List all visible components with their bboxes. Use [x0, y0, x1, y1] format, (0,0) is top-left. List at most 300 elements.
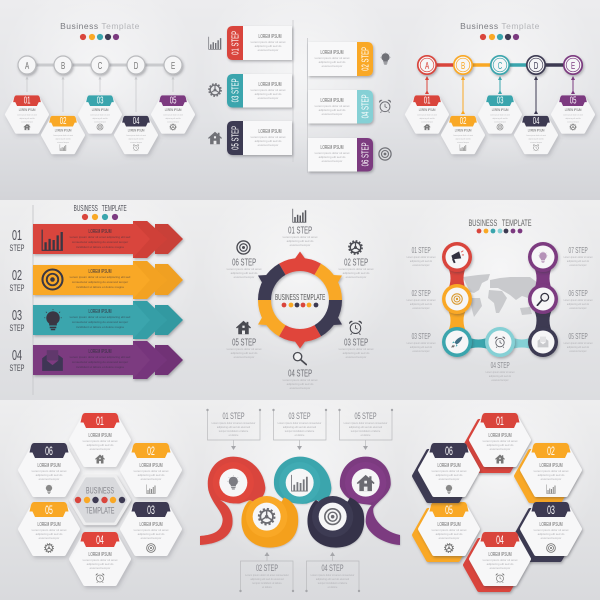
chain node 06 — [528, 284, 558, 314]
letters: D — [134, 59, 138, 71]
panel: arrow bars — [10, 205, 183, 395]
bracket 05 step: 05 STEP — [354, 411, 377, 421]
hexagon 06: LOREM IPSUM — [38, 462, 61, 468]
hexagon 02: 02 — [60, 116, 67, 126]
step 01 — [283, 209, 318, 247]
hexagon 04: LOREM IPSUM — [528, 128, 545, 133]
letters: E — [571, 59, 575, 71]
bracket 02 step — [239, 552, 294, 592]
swirl dark — [307, 496, 364, 548]
step 06: eiusmod tempor — [234, 275, 254, 279]
card 05 step: adipiscing elit sed do — [255, 139, 282, 143]
arrow bar 01: consectetur adipiscing do eiusmod tempor — [72, 240, 128, 244]
hexagon 03: 03 — [547, 504, 555, 518]
hexagon 01: adipiscing elit sed do — [487, 443, 514, 447]
card icons — [208, 37, 391, 160]
hexagon 03: Lorem ipsum dolor sit amet — [490, 113, 510, 117]
hexagon 02: Lorem ipsum dolor sit amet — [453, 134, 473, 137]
arrow bar 04: consectetur adipiscing do eiusmod tempor — [72, 360, 128, 364]
hexagon 05: adipiscing elit sed do — [165, 117, 181, 120]
hexagon 05 — [552, 95, 594, 132]
letters: A — [425, 59, 429, 71]
bracket 02 step: adipiscing elit sed do eiusmod — [250, 578, 284, 581]
hexagon 03: eiusmod tempor — [94, 120, 106, 124]
hexagon 01: LOREM IPSUM — [419, 107, 436, 112]
card 03 step: adipiscing elit sed do — [255, 92, 282, 96]
chain node 05 — [528, 327, 558, 357]
bracket 02 step: tempor incididunt ut labore — [252, 582, 282, 585]
heading: BUSINESS TEMPLATE — [468, 218, 532, 228]
step 02: adipiscing elit sed do — [343, 271, 370, 275]
bracket 05 step: Lorem ipsum dolor sit amet consectetur — [344, 422, 388, 425]
hexagon 02 — [42, 116, 84, 153]
step 06 — [227, 241, 262, 279]
swirl teal — [274, 457, 331, 504]
panel: circle chain with world map — [407, 218, 593, 382]
label 02 step: eiusmod tempor — [412, 307, 430, 310]
arrow bar 03: STEP — [10, 323, 24, 333]
hexagon 03: Lorem ipsum dolor sit amet — [534, 528, 569, 532]
label 07 step: Lorem ipsum dolor sit amet — [564, 256, 593, 259]
hexagon 03: LOREM IPSUM — [92, 107, 109, 112]
arrow bar 01: STEP — [10, 243, 24, 253]
card 06 step — [308, 138, 373, 172]
hexagon 04: eiusmod tempor — [90, 566, 110, 570]
hexagon 03: 03 — [97, 95, 104, 106]
label 03 step: 03 STEP — [412, 333, 431, 341]
hexagon 02: Lorem ipsum dolor sit amet — [134, 469, 169, 473]
step 06: adipiscing elit sed do — [231, 271, 258, 275]
arrow bar 02: consectetur adipiscing do eiusmod tempor — [72, 280, 128, 284]
bracket 01 step: 01 STEP — [222, 411, 245, 421]
step 03 — [339, 321, 374, 359]
arrow bar 03: LOREM IPSUM — [89, 308, 112, 314]
bracket 01 step: et dolore — [229, 434, 239, 437]
bracket 04 step: tempor incididunt ut labore — [318, 582, 348, 585]
hexagon 05: Lorem ipsum dolor sit amet — [563, 113, 583, 117]
card 06 step: 06 STEP — [360, 142, 371, 166]
label 06 step — [564, 290, 593, 310]
step 05: adipiscing elit sed do — [231, 351, 258, 355]
hexagon 06 — [20, 443, 78, 495]
card 02 step: 02 STEP — [360, 47, 371, 71]
hexagon 05: Lorem ipsum dolor sit amet — [163, 113, 183, 117]
hexagon 04: eiusmod tempor — [490, 566, 510, 570]
card 04 step: LOREM IPSUM — [321, 97, 344, 103]
hexagon 05: LOREM IPSUM — [165, 107, 182, 112]
hexagon 03: 03 — [147, 504, 155, 518]
hexagon 02: adipiscing elit sed do — [455, 137, 471, 141]
hexagon 01: 01 — [24, 95, 31, 106]
label 07 step: eiusmod tempor — [569, 264, 587, 267]
hexagon 01: LOREM IPSUM — [489, 432, 512, 438]
bracket 04 step: et dolore — [328, 586, 338, 589]
step 02: 02 STEP — [344, 257, 368, 268]
step 01: adipiscing elit sed do — [287, 239, 314, 243]
hexagon 06: eiusmod tempor — [439, 477, 459, 481]
card 02 step — [308, 42, 373, 76]
card 03 step: eiusmod tempor — [258, 96, 278, 100]
hexagon 04: Lorem ipsum dolor sit amet — [126, 134, 146, 137]
step 04: 04 STEP — [288, 368, 312, 379]
bracket 01 step: adipiscing elit sed do eiusmod — [217, 426, 251, 429]
vertical shadow line — [32, 205, 34, 395]
label 06 step: eiusmod tempor — [569, 307, 587, 310]
label 03 step: adipiscing elit sed do — [410, 346, 433, 349]
hexagon 02 — [516, 443, 580, 501]
hexagon 03: LOREM IPSUM — [140, 521, 163, 527]
hexagon 05: eiusmod tempor — [567, 120, 579, 124]
arrow bar 03: consectetur adipiscing do eiusmod tempor — [72, 320, 128, 324]
step 05: 05 STEP — [232, 337, 256, 348]
hexagon 01: adipiscing elit sed do — [87, 443, 114, 447]
hexagon 05: LOREM IPSUM — [565, 107, 582, 112]
colour dots — [82, 214, 118, 220]
arrow bar 01: Lorem ipsum dolor sit amet adipiscing elit sed — [70, 235, 131, 239]
hexagon 05: adipiscing elit sed do — [436, 532, 463, 536]
coloured letter circles — [418, 56, 582, 74]
card 03 step: 03 STEP — [230, 78, 241, 102]
hexagon 05 — [152, 95, 194, 132]
ring segments with spikes — [258, 252, 342, 348]
label 06 step: Lorem ipsum dolor sit amet — [564, 299, 593, 302]
hexagon 06: eiusmod tempor — [39, 477, 59, 481]
chain node 02 — [442, 284, 472, 314]
inner rings — [420, 58, 580, 72]
hexagon 05: 05 — [570, 95, 577, 106]
step 05: Lorem ipsum dolor sit amet — [227, 347, 262, 351]
world map — [463, 274, 538, 317]
bracket 02 step: 02 STEP — [256, 563, 278, 573]
hexagon 03: adipiscing elit sed do — [138, 532, 165, 536]
hexagon 03: adipiscing elit sed do — [538, 532, 565, 536]
hexagon 05: eiusmod tempor — [39, 536, 59, 540]
hexagon 01: Lorem ipsum dolor sit amet — [483, 439, 518, 443]
hexagon 03: 03 — [497, 95, 504, 106]
hexagon 06: LOREM IPSUM — [438, 462, 461, 468]
step 05: eiusmod tempor — [234, 355, 254, 359]
arrow bar 04: 04 — [12, 347, 22, 364]
label 02 step: 02 STEP — [412, 290, 431, 298]
hexagon 04: 04 — [533, 116, 540, 126]
panel: hexagon timeline coloured — [406, 21, 594, 153]
hexagon 02: eiusmod tempor — [141, 477, 161, 481]
hexagon 05 — [414, 502, 478, 560]
hexagon 03: eiusmod tempor — [494, 120, 506, 124]
hexagon 01: eiusmod tempor — [490, 447, 510, 451]
hexagon 02: 02 — [147, 445, 155, 459]
hexagon 04: 04 — [96, 534, 104, 548]
hexagon 04: adipiscing elit sed do — [87, 562, 114, 566]
hexagon 06: adipiscing elit sed do — [36, 473, 63, 477]
card 04 step: adipiscing elit sed do — [319, 108, 346, 112]
heading: BUSINESS TEMPLATE — [74, 205, 127, 213]
card 01 step: 01 STEP — [230, 31, 241, 55]
hexagon 04: LOREM IPSUM — [89, 551, 112, 557]
heading: business template: Business Template — [460, 21, 540, 31]
hexagon 04 — [115, 116, 157, 153]
connector line and arrows — [27, 65, 173, 112]
label 03 step: eiusmod tempor — [412, 350, 430, 353]
step 01: Lorem ipsum dolor sit amet — [283, 235, 318, 239]
bracket 04 step — [305, 552, 360, 592]
hexagon 06: 06 — [445, 445, 453, 459]
hexagon 01: eiusmod tempor — [90, 447, 110, 451]
card 02 step: eiusmod tempor — [322, 64, 342, 68]
card 06 step: eiusmod tempor — [322, 159, 342, 163]
hexagon 03 — [516, 502, 580, 560]
label 02 step — [407, 290, 436, 310]
panel: hexagon timeline grey — [6, 21, 194, 153]
bracket 04 step: 04 STEP — [321, 563, 344, 573]
hexagon 02: 02 — [460, 116, 467, 126]
letters: A — [25, 59, 29, 71]
hexagon 04: adipiscing elit sed do — [128, 137, 144, 141]
hexagon 03: LOREM IPSUM — [492, 107, 509, 112]
centre title: BUSINESS TEMPLATE — [275, 294, 326, 302]
label 04 step — [486, 362, 515, 382]
swirl purple — [340, 457, 400, 545]
letters: E — [171, 59, 175, 71]
hexagon 06: Lorem ipsum dolor sit amet — [432, 469, 467, 473]
arrow bar 04 — [10, 341, 183, 379]
hexagon 04 — [71, 532, 129, 584]
hexagon 01: eiusmod tempor — [21, 120, 33, 124]
label 05 step — [564, 333, 593, 353]
label 04 step: Lorem ipsum dolor sit amet — [486, 371, 515, 374]
label 01 step: Lorem ipsum dolor sit amet — [407, 256, 436, 259]
step 06: 06 STEP — [232, 257, 256, 268]
colour dots — [477, 229, 522, 233]
arrow bar 02: incididunt ut labore et dolore magna — [76, 285, 124, 289]
hexagon 02: eiusmod tempor — [457, 141, 469, 144]
bracket 03 step: adipiscing elit sed do eiusmod — [283, 426, 317, 429]
chain node 04 — [485, 327, 515, 357]
hexagon 06 — [414, 443, 478, 501]
step 01: eiusmod tempor — [290, 243, 310, 247]
centre hexagon: TEMPLATE — [85, 505, 115, 516]
hexagon 01 — [406, 95, 448, 132]
hexagon 04: eiusmod tempor — [530, 141, 542, 144]
step 01: 01 STEP — [288, 225, 312, 236]
hexagon 02: 02 — [547, 445, 555, 459]
hexagon 02: Lorem ipsum dolor sit amet — [53, 134, 73, 137]
step 02: eiusmod tempor — [346, 275, 366, 279]
step 03: eiusmod tempor — [346, 355, 366, 359]
card 01 step — [227, 26, 292, 60]
letters: D — [534, 59, 538, 71]
chain connectors — [447, 265, 553, 350]
heading: business template: Business Template — [60, 21, 140, 31]
step 04: eiusmod tempor — [290, 386, 310, 390]
panel: hexagon ring with coloured backs — [414, 413, 580, 590]
bracket 04 step: Lorem ipsum dolor sit amet consectetur — [311, 574, 355, 577]
label 07 step — [564, 247, 593, 267]
hexagon 01: Lorem ipsum dolor sit amet — [417, 113, 437, 117]
panel: hexagon flower — [20, 413, 180, 584]
hexagon 05: Lorem ipsum dolor sit amet — [432, 528, 467, 532]
hexagon 03 — [122, 502, 180, 554]
hexagon 02: adipiscing elit sed do — [138, 473, 165, 477]
hexagon 04 — [515, 116, 557, 153]
label 02 step: Lorem ipsum dolor sit amet — [407, 299, 436, 302]
colour dots — [480, 34, 519, 40]
hexagon 02: LOREM IPSUM — [140, 462, 163, 468]
arrow bar 01: 01 — [12, 227, 22, 244]
hexagon 05: 05 — [45, 504, 53, 518]
hexagon 05: 05 — [445, 504, 453, 518]
hexagon 05: eiusmod tempor — [439, 536, 459, 540]
step 03: adipiscing elit sed do — [343, 351, 370, 355]
step 02 — [339, 241, 374, 279]
label 05 step: 05 STEP — [569, 333, 588, 341]
hexagon 05: adipiscing elit sed do — [36, 532, 63, 536]
hexagon 01: 01 — [496, 415, 504, 429]
bracket 05 step — [338, 409, 393, 450]
card 03 step: LOREM IPSUM — [259, 81, 282, 87]
arrow bar 04: incididunt ut labore et dolore magna — [76, 365, 124, 369]
chain node 01 — [442, 242, 472, 272]
label 05 step: Lorem ipsum dolor sit amet — [564, 342, 593, 345]
hexagon 05: Lorem ipsum dolor sit amet — [32, 528, 67, 532]
arrow bar 02 — [10, 261, 183, 299]
card 01 step: LOREM IPSUM — [259, 33, 282, 39]
hexagon 02: adipiscing elit sed do — [538, 473, 565, 477]
label 05 step: adipiscing elit sed do — [567, 346, 590, 349]
card 01 step: adipiscing elit sed do — [255, 44, 282, 48]
bracket 03 step: Lorem ipsum dolor sit amet consectetur — [278, 422, 322, 425]
card 05 step: LOREM IPSUM — [259, 128, 282, 134]
arrow bar 01: incididunt ut labore et dolore magna — [76, 245, 124, 249]
bracket 03 step: et dolore — [295, 434, 305, 437]
label 04 step: adipiscing elit sed do — [489, 375, 512, 378]
hexagon 03 — [479, 95, 521, 132]
card 04 step: 04 STEP — [360, 94, 371, 118]
label 01 step: 01 STEP — [412, 247, 431, 255]
hexagon 03: LOREM IPSUM — [540, 521, 563, 527]
hexagon 05: adipiscing elit sed do — [565, 117, 581, 120]
letter circles — [18, 56, 182, 74]
card 05 step: 05 STEP — [230, 126, 241, 150]
bracket 05 step: et dolore — [361, 434, 371, 437]
hexagon 02: LOREM IPSUM — [55, 128, 72, 133]
hexagon 02 — [122, 443, 180, 495]
hexagon 01: eiusmod tempor — [421, 120, 433, 124]
arrow bar 01 — [10, 221, 183, 258]
hexagon 01: adipiscing elit sed do — [19, 117, 35, 120]
arrow bar 02: LOREM IPSUM — [89, 268, 112, 274]
bracket 05 step: adipiscing elit sed do eiusmod — [349, 426, 383, 429]
card 06 step: LOREM IPSUM — [321, 144, 344, 150]
card 01 step: eiusmod tempor — [258, 48, 278, 52]
arrow bar 02: 02 — [12, 267, 22, 284]
label 02 step: adipiscing elit sed do — [410, 303, 433, 306]
hexagon 02: eiusmod tempor — [57, 141, 69, 144]
hexagon 05: eiusmod tempor — [167, 120, 179, 124]
card 01 step: Lorem ipsum dolor sit amet — [251, 40, 286, 44]
step 04: Lorem ipsum dolor sit amet — [283, 378, 318, 382]
letters: C — [498, 59, 502, 71]
hexagon 01: LOREM IPSUM — [19, 107, 36, 112]
hexagon 02: LOREM IPSUM — [455, 128, 472, 133]
arrow bar 04: LOREM IPSUM — [89, 348, 112, 354]
hexagon 04: 04 — [496, 534, 504, 548]
label 01 step: eiusmod tempor — [412, 264, 430, 267]
hexagon 03: eiusmod tempor — [141, 536, 161, 540]
hexagon 01: Lorem ipsum dolor sit amet — [83, 439, 118, 443]
hexagon 02 — [442, 116, 484, 153]
card 04 step: Lorem ipsum dolor sit amet — [315, 104, 350, 108]
card 02 step: LOREM IPSUM — [321, 49, 344, 55]
hexagon 01: 01 — [424, 95, 431, 106]
step 02: Lorem ipsum dolor sit amet — [339, 267, 374, 271]
hexagon 04 — [465, 532, 529, 590]
hexagon 04: 04 — [133, 116, 140, 126]
label 03 step — [407, 333, 436, 353]
centre hexagon — [71, 477, 129, 523]
letters: B — [461, 59, 465, 71]
hexagon 05: LOREM IPSUM — [438, 521, 461, 527]
letters: C — [98, 59, 102, 71]
card 02 step: adipiscing elit sed do — [319, 60, 346, 64]
label 04 step: eiusmod tempor — [491, 379, 509, 382]
bracket 03 step: tempor incididunt ut labore — [285, 430, 315, 433]
panel: step cards — [208, 20, 391, 173]
arrow bar 04: Lorem ipsum dolor sit amet adipiscing elit sed — [70, 355, 131, 359]
hexagon 04: Lorem ipsum dolor sit amet — [483, 558, 518, 562]
step 04: adipiscing elit sed do — [287, 382, 314, 386]
hexagon 05: 05 — [170, 95, 177, 106]
centre dots — [282, 303, 318, 307]
bracket 02 step: et dolore — [262, 586, 272, 589]
hexagon 04: LOREM IPSUM — [128, 128, 145, 133]
bracket 01 step — [206, 409, 261, 450]
chain node 03 — [442, 327, 472, 357]
step 03: 03 STEP — [344, 337, 368, 348]
hexagon 02: adipiscing elit sed do — [55, 137, 71, 141]
hexagon 06: Lorem ipsum dolor sit amet — [32, 469, 67, 473]
card 05 step: eiusmod tempor — [258, 143, 278, 147]
hexagon 02: LOREM IPSUM — [540, 462, 563, 468]
swirl shapes — [200, 457, 400, 548]
step 04 — [283, 352, 318, 390]
chain node 07 — [528, 242, 558, 272]
step 03: Lorem ipsum dolor sit amet — [339, 347, 374, 351]
arrow bar 03: Lorem ipsum dolor sit amet adipiscing elit sed — [70, 315, 131, 319]
coloured connector segments — [427, 63, 573, 67]
bracket 01 step: Lorem ipsum dolor sit amet consectetur — [212, 422, 256, 425]
bracket 04 step: adipiscing elit sed do eiusmod — [316, 578, 350, 581]
card 05 step: Lorem ipsum dolor sit amet — [251, 135, 286, 139]
label 05 step: eiusmod tempor — [569, 350, 587, 353]
hexagon 03: eiusmod tempor — [541, 536, 561, 540]
label 03 step: Lorem ipsum dolor sit amet — [407, 342, 436, 345]
centre hexagon: BUSINESS — [86, 485, 114, 496]
label 07 step: 07 STEP — [569, 247, 588, 255]
hexagon 04: eiusmod tempor — [130, 141, 142, 144]
arrow bar 04: STEP — [10, 363, 24, 373]
bracket 03 step: 03 STEP — [288, 411, 311, 421]
bracket 05 step: tempor incididunt ut labore — [351, 430, 381, 433]
arrow bar 02: Lorem ipsum dolor sit amet adipiscing elit sed — [70, 275, 131, 279]
card 02 step: Lorem ipsum dolor sit amet — [315, 56, 350, 60]
hexagon 04: Lorem ipsum dolor sit amet — [526, 134, 546, 137]
hexagon 02: Lorem ipsum dolor sit amet — [534, 469, 569, 473]
label 01 step: adipiscing elit sed do — [410, 260, 433, 263]
arrow bar 02: STEP — [10, 283, 24, 293]
panel: circular ring — [227, 209, 374, 390]
arrow bar 03: 03 — [12, 307, 22, 324]
